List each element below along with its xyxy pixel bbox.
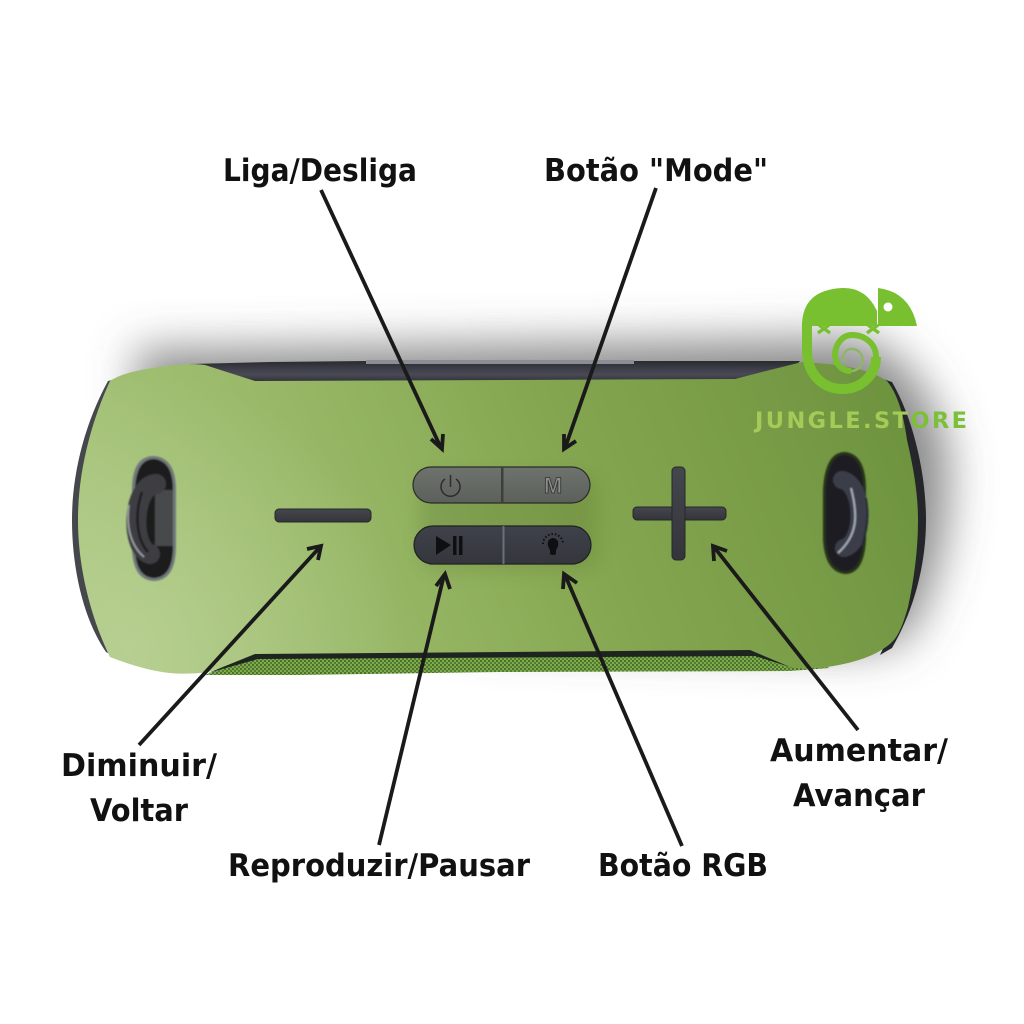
left handle slot	[128, 456, 176, 581]
chameleon tail outer	[807, 322, 876, 389]
dark line above mesh	[208, 650, 790, 673]
button shadow	[420, 474, 598, 570]
chameleon tail spiral end	[843, 349, 863, 371]
label: Aumentar/Avançar: Aumentar/	[770, 733, 949, 769]
arrow: Mode	[564, 188, 656, 449]
label: Liga/Desliga: Liga/Desliga	[223, 153, 417, 189]
mesh grille	[205, 652, 830, 675]
top dark band	[190, 361, 800, 384]
icon: light bulb	[543, 534, 563, 555]
arrow: Aumentar	[713, 546, 858, 730]
brand text: JUNGLE.STORE	[753, 408, 967, 434]
arrow: Reproduzir	[379, 574, 450, 845]
arrow: Liga/Desliga	[321, 190, 443, 449]
power and mode buttons	[413, 467, 590, 503]
play and RGB buttons	[414, 526, 591, 564]
top grey strip	[366, 360, 634, 364]
label: Botão RGB: Botão RGB	[598, 848, 768, 884]
arrow: Diminuir	[139, 546, 321, 745]
left strap loop	[136, 484, 156, 554]
label: Diminuir/Voltar: Voltar	[90, 793, 189, 829]
label: Botão Mode: Botão "Mode"	[544, 153, 768, 189]
chameleon body	[802, 288, 877, 326]
chameleon head	[878, 288, 917, 326]
icon: M letter: M	[544, 473, 562, 498]
chameleon tail inner ring	[835, 335, 876, 371]
strap anchor	[155, 490, 173, 546]
label: Aumentar/Avançar: Avançar	[793, 778, 926, 814]
dark side edges	[72, 378, 120, 660]
plus button	[633, 467, 726, 560]
label: Diminuir/Voltar: Diminuir/	[61, 748, 218, 784]
right strap loop	[842, 480, 860, 548]
minus button	[275, 509, 371, 522]
label: Diminuir/Voltar	[61, 748, 218, 829]
speaker body	[72, 360, 926, 675]
right handle slot	[823, 452, 867, 574]
speaker drop shadow	[135, 338, 949, 650]
green top panel	[78, 362, 918, 674]
icon: power	[441, 475, 460, 496]
chameleon feet	[818, 325, 879, 333]
arrow: RGB	[563, 574, 682, 846]
chameleon eye	[884, 302, 892, 312]
label: Reproduzir/Pausar: Reproduzir/Pausar	[228, 848, 531, 884]
label: Aumentar/Avançar	[770, 733, 949, 814]
light reflection lower left	[78, 381, 440, 674]
logo: Jungle Store chameleon	[753, 288, 967, 434]
icon: play pause	[436, 536, 462, 555]
